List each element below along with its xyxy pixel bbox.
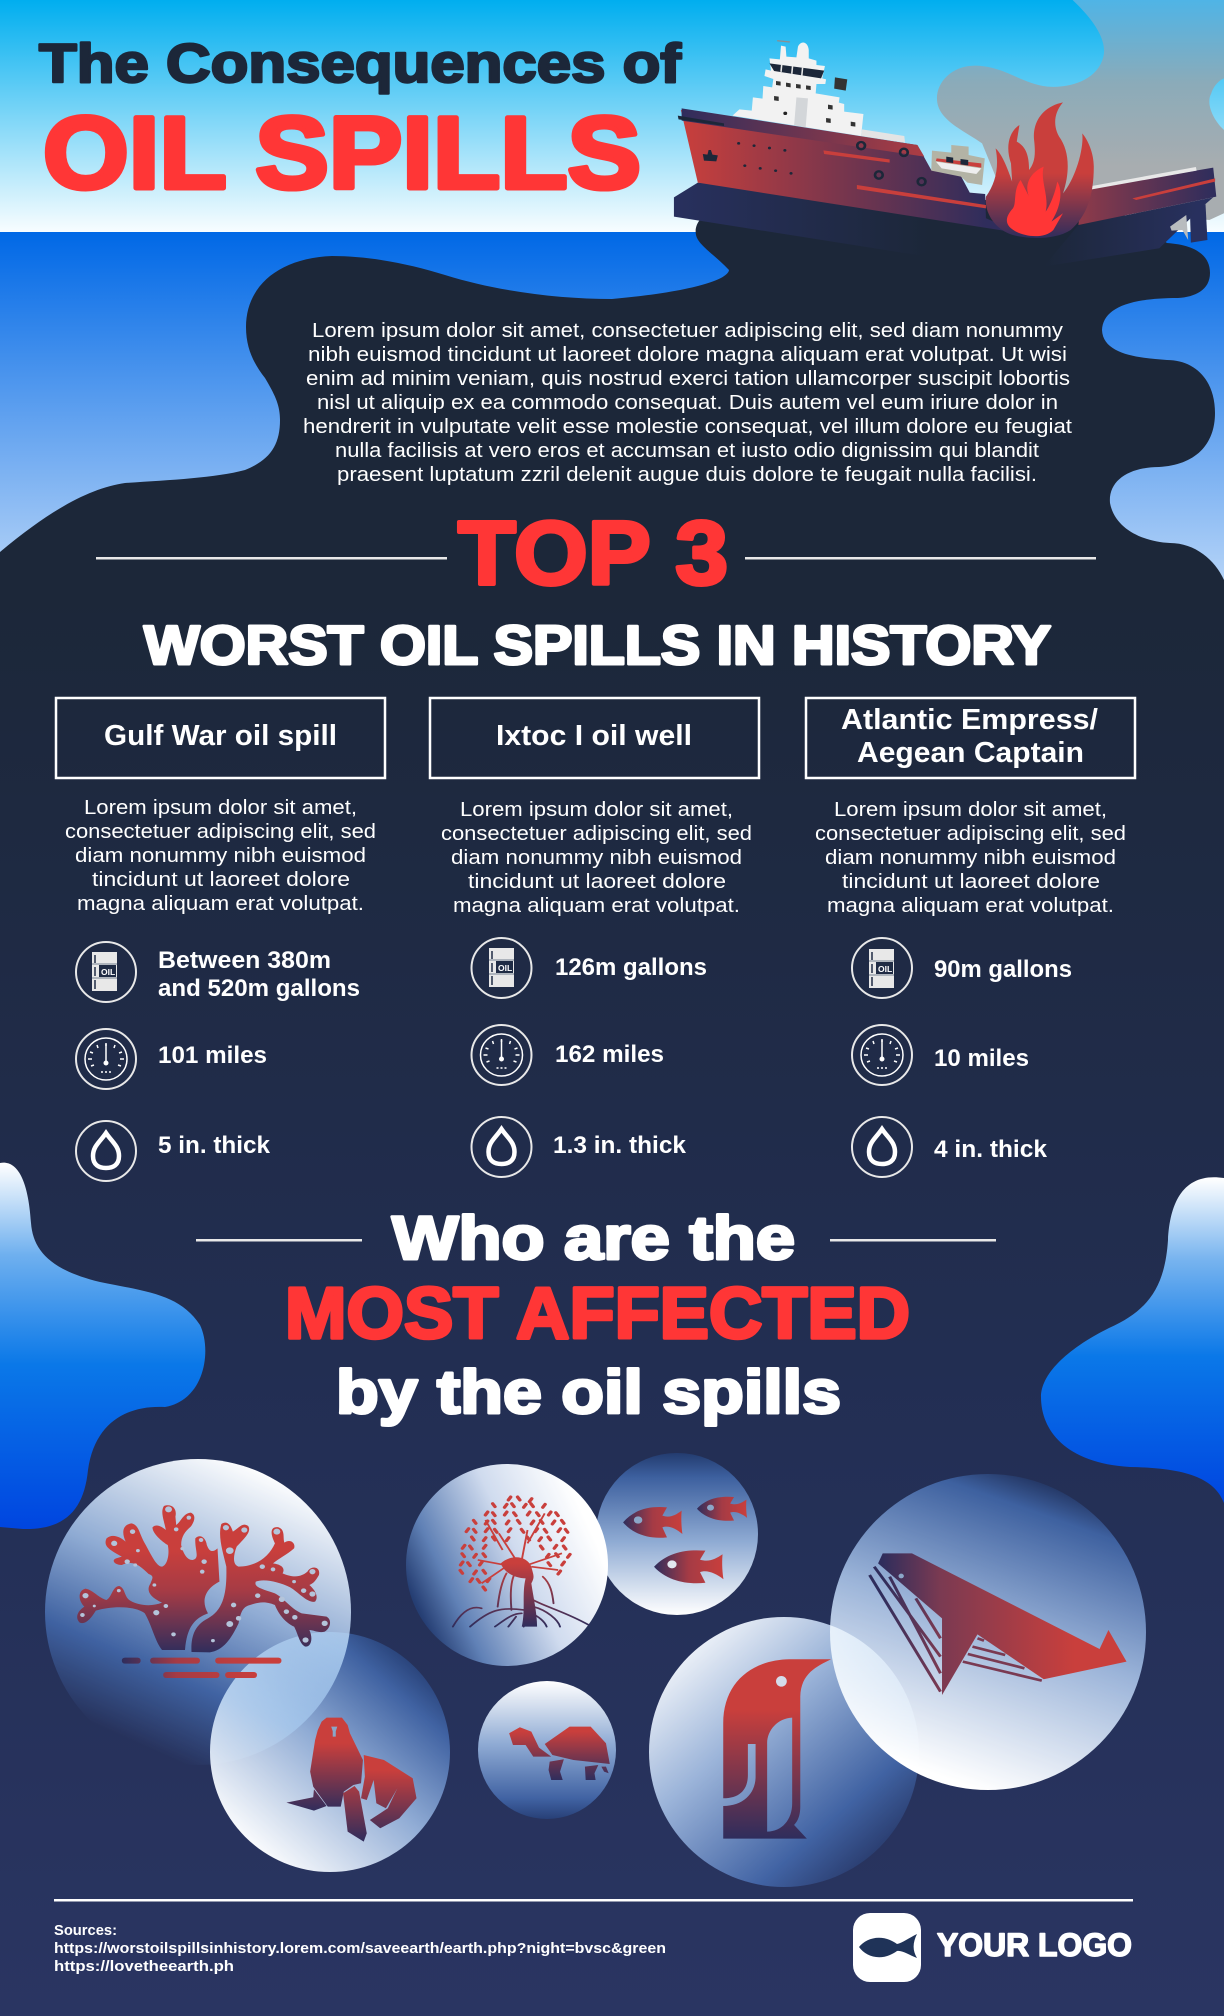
stat: thickness: 4 in. thick [934,1136,1048,1163]
icon: whale [870,1553,1127,1695]
bubble: seal [210,1632,450,1872]
text: Atlantic Empress description: tincidunt ut laoreet dolore [842,871,1100,893]
stat: volume [158,947,360,1002]
sources: https://lovetheearth.ph [54,1958,234,1975]
ship stern [1044,167,1216,267]
box: Gulf War title [56,698,385,778]
stat: thickness: 5 in. thick [158,1132,271,1159]
sources: Sources: [54,1922,117,1939]
bubble: coral [45,1459,351,1765]
icon: gauge [472,1025,532,1085]
text: Atlantic Empress description: diam nonummy nibh euismod [825,847,1116,869]
bubble: mangrove [406,1464,608,1666]
background: sky [0,0,1224,232]
text: Atlantic Empress description: magna aliquam erat volutpat. [827,895,1114,917]
logo [853,1913,1132,1982]
icon: penguin [723,1659,831,1839]
icon: coral [77,1505,330,1678]
ship rail [678,116,724,126]
background: sea [0,232,1224,632]
sources: https://worstoilspillsinhistory.lorem.com/saveearth/earth.php?night=bvsc&green [54,1940,666,1957]
icon: drop [472,1117,532,1177]
text: Gulf War description: tincidunt ut laoreet dolore [92,869,350,891]
text: Atlantic Empress description: Lorem ipsum dolor sit amet, [834,799,1107,821]
intro paragraph: hendrerit in vulputate velit esse molestie consequat, vel illum dolore eu feugiat [303,416,1072,438]
box: Ixtoc title [430,698,759,778]
text: Atlantic Empress description [815,799,1126,917]
text: Gulf War description: consectetuer adipiscing elit, sed [65,821,376,843]
text: Ixtoc description: magna aliquam erat volutpat. [453,895,740,917]
logo text: YOUR LOGO [937,1927,1132,1963]
column 2: Ixtoc I [430,698,759,1177]
column 3: Atlantic Empress [806,698,1135,1177]
icon: drop [76,1121,136,1181]
text: Ixtoc description [441,799,752,917]
coral pores [80,1506,328,1643]
box: Ixtoc title: Ixtoc I oil well [496,720,692,752]
left blue blob [0,1163,205,1529]
icon: turtle [509,1727,610,1780]
intro paragraph [303,320,1072,486]
heading: who are the most affected: Who are the [392,1204,795,1272]
intro paragraph: nisl ut aliquip ex ea commodo consequat. Duis autem vel eum iriure dolor in [317,392,1058,414]
icon: oil barrel [76,942,136,1002]
heading: who are the most affected: MOST AFFECTED [285,1274,910,1354]
icon: oil barrel [472,938,532,998]
sources [54,1922,666,1975]
stat: volume: and 520m gallons [158,975,360,1002]
heading: worst oil spills: WORST OIL SPILLS IN HISTORY [144,614,1051,676]
icon: oil barrel: OIL [878,964,892,974]
lifeboat [931,145,985,185]
heading: who are the most affected [285,1204,910,1426]
stat: volume: Between 380m [158,947,331,974]
stat: volume: 126m gallons [555,954,707,981]
stat: volume: 90m gallons [934,956,1072,983]
box: Atlantic Empress title: Aegean Captain [857,737,1084,769]
coral sea floor dashes [122,1658,281,1678]
text: Ixtoc description: diam nonummy nibh euismod [451,847,742,869]
icon: drop [852,1117,912,1177]
text: Ixtoc description: consectetuer adipiscing elit, sed [441,823,752,845]
bubble: fish [596,1453,758,1615]
heading: who are the most affected: by the oil spills [336,1358,841,1426]
ship red stripes [823,150,986,208]
text: Ixtoc description: tincidunt ut laoreet dolore [468,871,726,893]
icon: mangrove tree [453,1497,589,1627]
intro paragraph: Lorem ipsum dolor sit amet, consectetuer adipiscing elit, sed diam nonummy [312,320,1063,342]
title [39,32,682,210]
icon: fish [623,1497,747,1583]
right blue blob [1041,1177,1224,1503]
intro paragraph: enim ad minim veniam, quis nostrud exerci tation ullamcorper suscipit lobortis [306,368,1070,390]
ship deck band [682,108,924,157]
icon: oil barrel: OIL [498,963,512,973]
icon: oil barrel [852,938,912,998]
ship rivets [703,142,793,175]
title: The Consequences of [39,32,682,94]
text: Ixtoc description: Lorem ipsum dolor sit amet, [460,799,733,821]
intro paragraph: nulla facilisis at vero eros et accumsan et iusto odio dignissim qui blandit [335,440,1039,462]
bubble: whale [830,1474,1146,1790]
ship lower hull [674,183,1009,255]
ship portholes [857,142,1200,212]
heading: top 3: TOP 3 [458,504,728,604]
box: Atlantic Empress title [806,698,1135,778]
icon: gauge [76,1029,136,1089]
logo fish [859,1934,917,1958]
intro paragraph: praesent luptatum zzril delenit augue duis dolore te feugait nulla facilisi. [337,464,1037,486]
icon: gauge [852,1025,912,1085]
stat: thickness: 1.3 in. thick [553,1132,687,1159]
icon: oil barrel: OIL [101,967,115,977]
icon: seal [286,1718,417,1842]
box: Atlantic Empress title: Atlantic Empress/ [841,704,1098,736]
ship superstructure [732,40,905,143]
bubble: turtle [478,1681,616,1819]
intro paragraph: nibh euismod tincidunt ut laoreet dolore magna aliquam erat volutpat. Ut wisi [308,344,1067,366]
text: Gulf War description: Lorem ipsum dolor sit amet, [84,797,357,819]
stat: miles: 10 miles [934,1045,1029,1072]
ship [674,40,1216,267]
text: Gulf War description: magna aliquam erat volutpat. [77,893,364,915]
bubble: penguin [649,1617,919,1887]
text: Atlantic Empress description: consectetuer adipiscing elit, sed [815,823,1126,845]
stat: miles: 101 miles [158,1042,267,1069]
box: Gulf War title: Gulf War oil spill [104,720,337,752]
title: OIL SPILLS [43,96,641,210]
column 1: Gulf War [56,698,385,1181]
smoke cloud [937,0,1224,220]
fire [986,102,1094,238]
ship red hull [681,110,1021,233]
text: Gulf War description: diam nonummy nibh euismod [75,845,366,867]
stat: miles: 162 miles [555,1041,664,1068]
text: Gulf War description [65,797,376,915]
